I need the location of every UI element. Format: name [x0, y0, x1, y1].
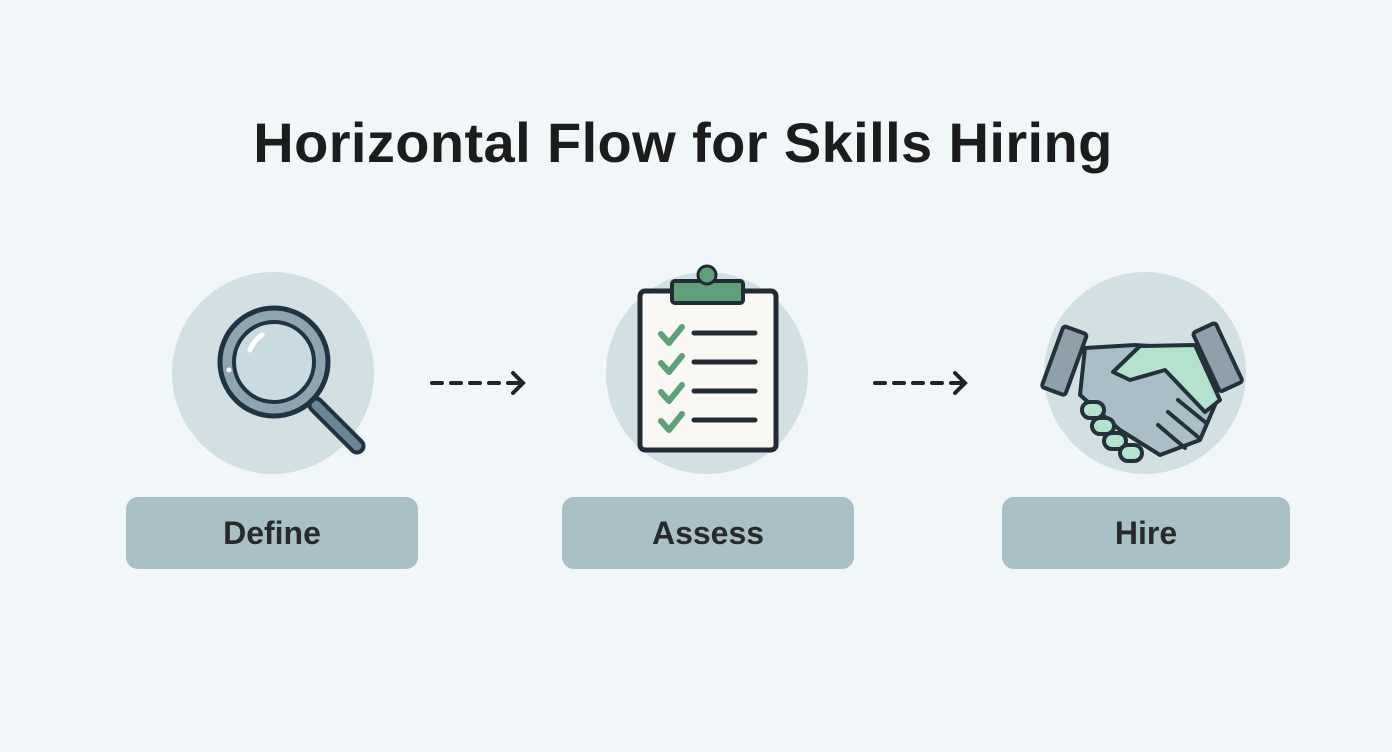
label: Define — [126, 497, 418, 569]
label: Assess: Assess — [652, 514, 764, 550]
label: Hire: Hire — [1115, 514, 1177, 550]
icon: magnifier — [172, 272, 374, 474]
arrow 1 — [432, 373, 523, 393]
arrow 2 — [875, 373, 965, 393]
icon: handshake — [1041, 272, 1246, 474]
label: Define: Define — [223, 514, 321, 550]
label: Assess — [562, 497, 854, 569]
icon: clipboard — [606, 266, 808, 474]
label: Hire — [1002, 497, 1290, 569]
title: Horizontal Flow for Skills Hiring — [253, 111, 1113, 174]
